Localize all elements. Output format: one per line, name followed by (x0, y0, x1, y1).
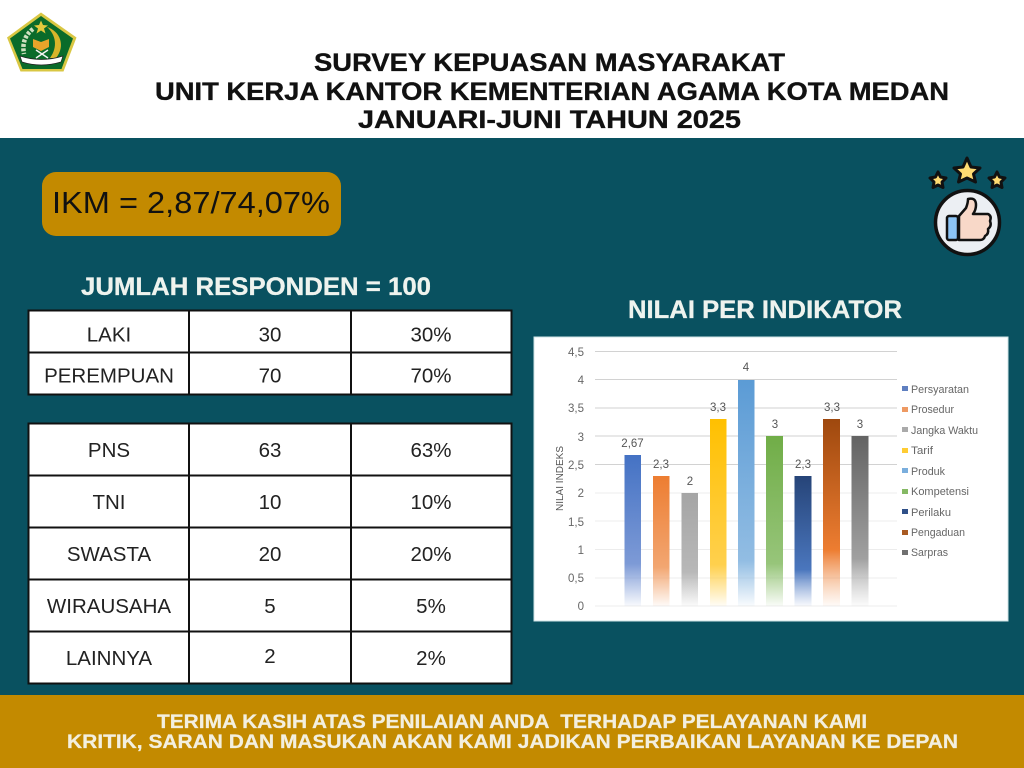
table: occupation: WIRAUSAHA (47, 595, 171, 618)
bar chart: nilai per indikator: 3,3 (824, 402, 840, 414)
table: gender: PEREMPUAN (44, 364, 174, 388)
table: occupation: 63 (259, 439, 281, 462)
table: gender: 30% (410, 324, 452, 346)
chart legend: Perilaku (911, 507, 951, 519)
chart legend: Pengaduan (911, 527, 965, 539)
table: gender (28, 310, 512, 395)
chart legend: Persyaratan (911, 384, 969, 396)
table: occupation (28, 423, 512, 684)
bar chart: nilai per indikator: 3 (772, 419, 778, 431)
bar chart: nilai per indikator: 3 (578, 432, 584, 444)
heading: nilai per indikator: NILAI PER INDIKATOR (628, 296, 902, 324)
table: occupation: SWASTA (67, 543, 151, 566)
table: occupation: 20 (259, 543, 281, 566)
table: occupation: LAINNYA (66, 647, 152, 670)
bar chart: nilai per indikator: 3,3 (710, 402, 726, 414)
bar chart: nilai per indikator: 2,3 (795, 459, 811, 471)
table: occupation: 10 (259, 491, 281, 514)
chart legend: Tarif (911, 445, 934, 457)
chart legend: Produk (911, 466, 945, 478)
footer message: TERIMA KASIH ATAS PENILAIAN ANDA TERHADAP PELAYANAN KAMI (157, 712, 867, 733)
heading: jumlah responden: JUMLAH RESPONDEN = 100 (81, 273, 431, 301)
bar chart: nilai per indikator: 2,67 (621, 438, 644, 450)
bar chart: nilai per indikator (534, 337, 1008, 621)
table: occupation: 10% (410, 491, 452, 514)
callout: IKM score (42, 172, 341, 236)
chart legend: Prosedur (911, 404, 954, 416)
bar chart: nilai per indikator: 2 (687, 476, 693, 488)
bar chart: nilai per indikator: 2 (578, 488, 584, 500)
bar chart: nilai per indikator: 1 (578, 545, 584, 557)
chart legend: Jangka Waktu (911, 425, 978, 437)
table: gender: 70% (410, 364, 452, 388)
table: occupation: 5% (416, 595, 446, 618)
bar chart: nilai per indikator: 3 (857, 419, 863, 431)
bar chart: nilai per indikator: 4 (578, 375, 585, 387)
title: SURVEY KEPUASAN MASYARAKAT (314, 49, 785, 77)
main teal background (0, 138, 1024, 695)
title (155, 49, 949, 134)
title: UNIT KERJA KANTOR KEMENTERIAN AGAMA KOTA MEDAN (155, 78, 949, 106)
footer message (67, 712, 958, 753)
table: occupation: TNI (92, 491, 126, 514)
footer message: KRITIK, SARAN DAN MASUKAN AKAN KAMI JADIKAN PERBAIKAN LAYANAN KE DEPAN (67, 732, 958, 753)
bar chart: nilai per indikator: 2,5 (568, 460, 584, 472)
table: occupation: PNS (88, 439, 130, 462)
chart legend: Sarpras (911, 547, 948, 559)
title: JANUARI-JUNI TAHUN 2025 (358, 106, 741, 134)
chart legend: Kompetensi (911, 486, 969, 498)
icon: ministry logo (7, 12, 76, 72)
callout: IKM score: IKM = 2,87/74,07% (52, 185, 330, 220)
header band (0, 0, 1024, 138)
table: occupation: 2% (416, 647, 446, 670)
bar chart: nilai per indikator: 4 (743, 362, 750, 374)
table: occupation: 63% (410, 439, 452, 462)
icon: thumbs up with stars (930, 158, 1005, 254)
table: gender: 30 (259, 324, 281, 346)
footer band (0, 695, 1024, 768)
bar chart: nilai per indikator: NILAI INDEKS (555, 446, 566, 511)
table: occupation: 2 (264, 645, 276, 668)
table: gender: 70 (259, 364, 281, 388)
bar chart: nilai per indikator: 3,5 (568, 403, 584, 415)
bar chart: nilai per indikator: 2,3 (653, 459, 669, 471)
bar chart: nilai per indikator: 4,5 (568, 347, 584, 359)
table: occupation: 5 (264, 595, 276, 618)
bar chart: nilai per indikator: 0 (578, 601, 584, 613)
bar chart: nilai per indikator: 1,5 (568, 517, 584, 529)
chart legend (902, 384, 978, 559)
table: gender: LAKI (87, 324, 131, 346)
bar chart: nilai per indikator: 0,5 (568, 573, 584, 585)
table: occupation: 20% (410, 543, 452, 566)
